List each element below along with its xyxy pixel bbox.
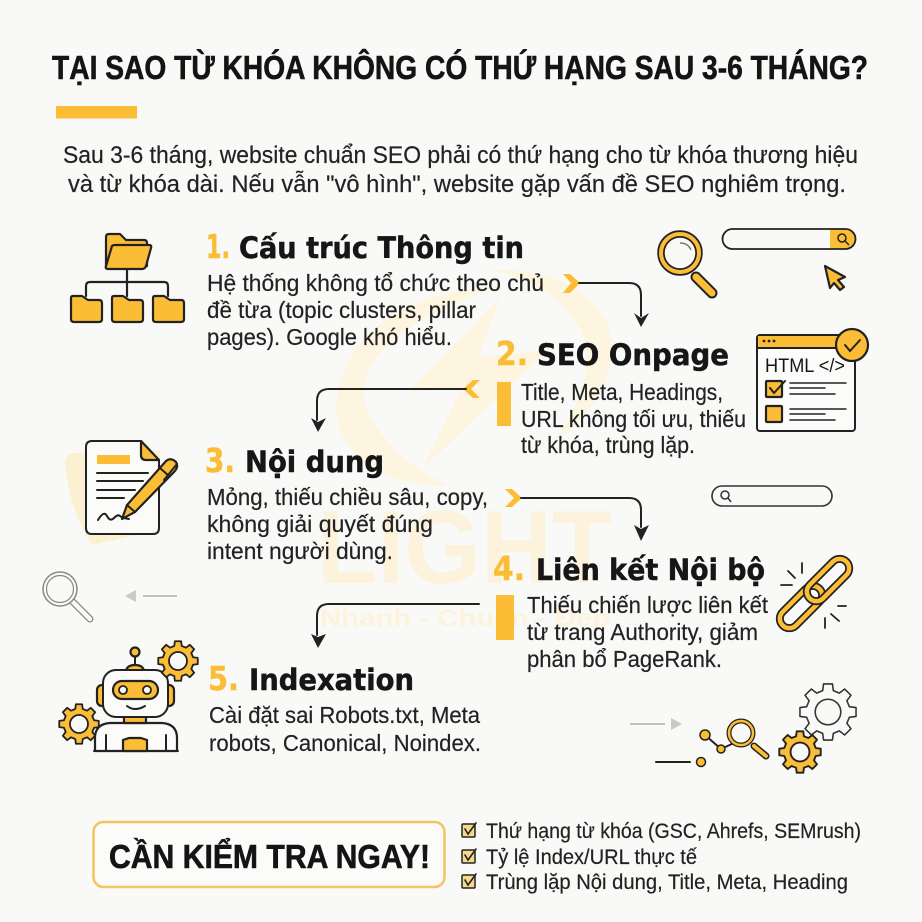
section 4: Liên kết Nội bộ — [493, 549, 768, 672]
icon: document and pencil — [86, 441, 177, 534]
section 1 body: pages). Google khó hiểu. — [207, 324, 452, 350]
section 4 body: Thiếu chiến lược liên kết — [527, 592, 768, 618]
icon: search bar — [722, 229, 856, 249]
section 2 body — [521, 379, 746, 458]
section 3 body: Mỏng, thiếu chiều sâu, copy, — [207, 484, 488, 510]
icon: magnifier — [661, 234, 712, 293]
icon: yellow gear — [779, 731, 821, 773]
icon: HTML checklist window: HTML </> — [765, 356, 845, 377]
section 5 body — [209, 702, 481, 756]
icon: cursor — [825, 266, 845, 290]
title accent bar — [56, 106, 137, 118]
section 1: Cấu trúc Thông tin — [206, 227, 544, 350]
section 2 body: từ khóa, trùng lặp. — [521, 432, 695, 458]
icon: robot gear top — [158, 641, 198, 681]
section 2: SEO Onpage — [496, 334, 746, 458]
section 1 heading: 1. — [206, 227, 230, 266]
arrow: section 2 to section 3 — [311, 380, 480, 432]
callout: check now — [94, 822, 444, 887]
arrow: section 4 to section 5 — [311, 604, 479, 648]
section 5 body: Cài đặt sai Robots.txt, Meta — [209, 702, 481, 728]
section 1 heading: Cấu trúc Thông tin — [239, 231, 524, 265]
icon: robot with gears — [59, 641, 198, 751]
section 4 body: phân bổ PageRank. — [527, 646, 722, 672]
icon: robot gear bottom — [59, 704, 99, 744]
section 5 heading — [208, 659, 414, 698]
arrow: section 1 to section 2 — [563, 274, 649, 327]
section 5 heading: Indexation — [249, 663, 414, 697]
section 5 body: robots, Canonical, Noindex. — [209, 730, 481, 756]
section 2 accent bar — [497, 382, 511, 426]
section 1 body — [207, 270, 544, 350]
icon: chain link — [776, 555, 853, 632]
icon: nodes with magnifier and gears — [656, 684, 856, 773]
section 3 body: không giải quyết đúng — [207, 511, 433, 537]
checklist — [462, 819, 861, 894]
section 2 body: URL không tối ưu, thiếu — [521, 406, 746, 432]
section 3 body: intent người dùng. — [207, 538, 393, 564]
section 4 heading — [493, 549, 765, 588]
icon: white gear — [800, 684, 856, 740]
arrow: section 3 to section 4 — [505, 489, 649, 541]
section 3 heading — [205, 441, 384, 480]
arrow: grey right — [630, 718, 682, 730]
icon: HTML checklist window — [757, 329, 868, 431]
section 3: Nội dung — [205, 441, 488, 564]
section 5: Indexation — [208, 659, 481, 756]
checklist item 3: Trùng lặp Nội dung, Title, Meta, Heading — [486, 870, 848, 894]
icon: folder hierarchy — [71, 234, 184, 322]
section 2 heading: 2. — [496, 334, 528, 373]
section 2 heading: SEO Onpage — [537, 338, 729, 372]
section 1 body: Hệ thống không tổ chức theo chủ — [207, 270, 544, 296]
section 3 heading: Nội dung — [245, 445, 384, 479]
section 4 heading: Liên kết Nội bộ — [536, 553, 765, 587]
intro text: và từ khóa dài. Nếu vẫn "vô hình", website gặp vấn đề SEO nghiêm trọng. — [68, 171, 846, 198]
section 2 body: Title, Meta, Headings, — [521, 379, 723, 405]
watermark: Light logo: LIGHT — [317, 490, 612, 606]
intro text — [63, 142, 858, 198]
arrow: grey left — [125, 590, 177, 602]
section 5 heading: 5. — [208, 659, 239, 698]
section 3 body — [207, 484, 488, 564]
icon: search pill — [712, 486, 832, 506]
icon: grey magnifier — [43, 572, 90, 619]
watermark: Light logo — [65, 270, 612, 632]
section 3 heading: 3. — [205, 441, 235, 480]
section 4 body — [527, 592, 768, 672]
section 1 body: đề từa (topic clusters, pillar — [207, 297, 476, 323]
intro text: Sau 3-6 tháng, website chuẩn SEO phải có thứ hạng cho từ khóa thương hiệu — [63, 142, 858, 169]
checklist item 2: Tỷ lệ Index/URL thực tế — [486, 845, 697, 869]
checklist item 1: Thứ hạng từ khóa (GSC, Ahrefs, SEMrush) — [486, 819, 861, 843]
callout: check now: CẦN KIỂM TRA NGAY! — [109, 838, 430, 875]
section 4 accent bar — [496, 595, 514, 640]
section 2 heading — [496, 334, 729, 373]
watermark: Light logo: Nhanh - Chuẩn - Đẹp — [320, 605, 610, 632]
section 4 heading: 4. — [493, 549, 525, 588]
section 4 body: từ trang Authority, giảm — [527, 619, 758, 645]
